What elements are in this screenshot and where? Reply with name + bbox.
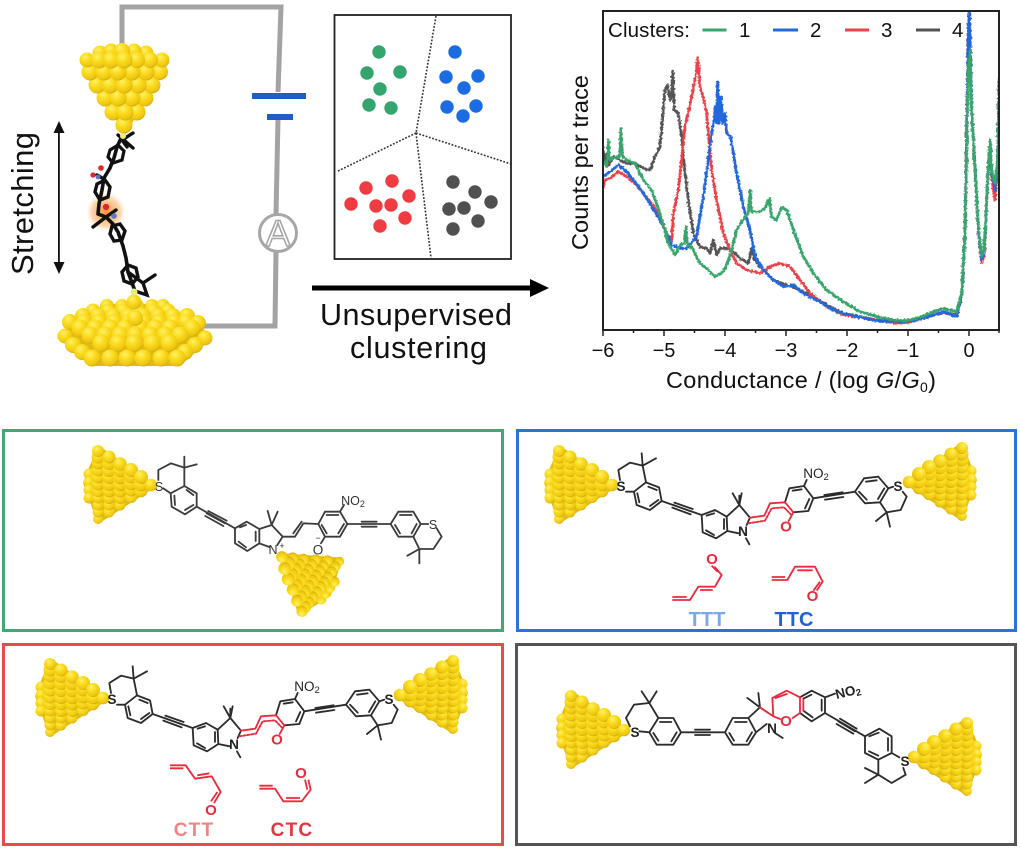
atom labels	[107, 679, 394, 752]
x axis labels: −2	[836, 340, 858, 362]
legend: 3	[881, 19, 892, 42]
x axis labels: −6	[592, 340, 614, 362]
curve: cluster 4	[603, 11, 999, 322]
icon: gold substrate electrode	[58, 294, 212, 366]
cluster 3 dots	[344, 174, 416, 233]
atom labels: S	[893, 479, 903, 494]
x axis labels	[592, 340, 975, 362]
x axis title: 0	[920, 379, 928, 395]
icon: battery	[252, 93, 306, 120]
fragment: TTT: O	[706, 551, 718, 568]
atom labels: 2	[855, 687, 863, 699]
legend	[608, 19, 963, 42]
icon: gold electrode right	[908, 717, 982, 796]
atom labels: S	[107, 692, 117, 707]
x axis labels: 0	[963, 340, 975, 362]
x axis labels: −5	[653, 340, 675, 362]
curve: cluster 1	[603, 50, 999, 321]
atom labels: O	[780, 713, 792, 730]
icon: gold electrode bottom	[255, 525, 353, 624]
atom labels: N	[738, 524, 748, 539]
atom labels	[616, 466, 903, 539]
atom labels: 2	[314, 685, 320, 696]
legend: Clusters:	[608, 19, 690, 42]
curve: cluster 2	[603, 8, 999, 322]
atom labels	[630, 681, 910, 769]
circuit wire	[122, 7, 281, 326]
atom labels: N	[268, 543, 278, 557]
icon: gold electrode right	[394, 655, 468, 734]
icon: gold electrode right	[903, 442, 977, 521]
icon: gold electrode left	[544, 445, 618, 524]
curves	[603, 8, 999, 323]
heading: unsupervised clustering: clustering	[350, 331, 487, 365]
atom labels: O	[271, 732, 283, 748]
legend: 2	[810, 19, 821, 42]
label: stretching: Stretching	[5, 132, 40, 275]
x axis labels: −3	[775, 340, 797, 362]
atom labels: NO	[834, 683, 857, 702]
heading: unsupervised clustering: Unsupervised	[320, 298, 512, 332]
cluster 4 dots	[442, 175, 498, 236]
atom labels	[155, 480, 437, 558]
x axis title: Conductance / (log G/G	[666, 367, 920, 393]
icon: gold electrode left	[83, 445, 157, 524]
panel: cluster 1 structure (green)	[4, 430, 502, 630]
atom labels: −	[315, 533, 321, 543]
fragment: CTC	[259, 765, 311, 801]
atom labels: N	[229, 737, 239, 752]
atom labels: +	[279, 541, 285, 551]
atom labels: S	[155, 480, 163, 494]
panel: cluster 2 structure (blue)	[518, 430, 1016, 631]
molecule skeleton	[109, 666, 398, 757]
icon: ammeter	[260, 213, 296, 254]
atom labels: NO	[803, 466, 823, 481]
x axis ticks	[603, 330, 999, 336]
fragment: CTT: O	[205, 802, 217, 819]
chart: conductance histogram	[567, 8, 999, 395]
plot frame	[603, 11, 999, 330]
atom labels: S	[384, 692, 394, 707]
atom labels: 2	[360, 499, 365, 509]
icon: molecule in junction	[86, 133, 155, 296]
label: CTC: CTC	[271, 820, 313, 841]
atom labels: S	[429, 518, 437, 532]
fragment: CTT	[170, 765, 221, 819]
fragment: TTC	[772, 567, 823, 605]
atom labels: N	[767, 721, 777, 736]
panel: break-junction schematic	[5, 7, 306, 366]
arrow: stretching direction	[54, 121, 64, 274]
cluster 1 dots	[360, 45, 407, 115]
x axis title: )	[928, 367, 936, 393]
legend: 1	[739, 19, 750, 42]
y axis title: Counts per trace	[567, 75, 593, 250]
fragment: CTC: O	[295, 765, 307, 782]
atom labels: O	[313, 542, 323, 558]
atom labels: O	[780, 518, 792, 536]
heading: unsupervised clustering	[320, 298, 512, 365]
label: CTT: CTT	[174, 820, 214, 841]
curve: cluster 3	[603, 11, 999, 323]
legend: 4	[952, 19, 963, 42]
molecule skeleton	[626, 691, 906, 783]
fragment: TTC: O	[807, 588, 819, 605]
icon: gold tip electrode	[80, 43, 170, 135]
x axis labels: −4	[714, 340, 736, 362]
label: TTT: TTT	[689, 609, 725, 631]
icon: ammeter: A	[266, 213, 291, 254]
cluster 2 dots	[439, 45, 485, 123]
cluster boundaries	[338, 16, 511, 258]
panel: cluster 4 structure (grey)	[516, 644, 1016, 844]
x axis labels: −1	[897, 340, 919, 362]
panel: clustering scatter	[334, 15, 511, 259]
atom labels: S	[900, 754, 910, 769]
atom labels: S	[630, 725, 640, 740]
icon: gold electrode left	[35, 658, 109, 737]
panel: cluster 3 structure (red)	[4, 644, 502, 844]
atom labels: NO	[341, 494, 360, 508]
arrow: clustering to histogram	[312, 279, 549, 297]
icon: gold electrode left	[556, 690, 630, 769]
atom labels: 2	[823, 472, 829, 483]
molecule skeleton	[158, 457, 442, 563]
fragment: TTT	[672, 551, 722, 600]
label: TTC: TTC	[775, 609, 813, 631]
atom labels: S	[616, 479, 626, 494]
atom labels: NO	[294, 679, 314, 694]
molecule skeleton	[618, 453, 907, 544]
